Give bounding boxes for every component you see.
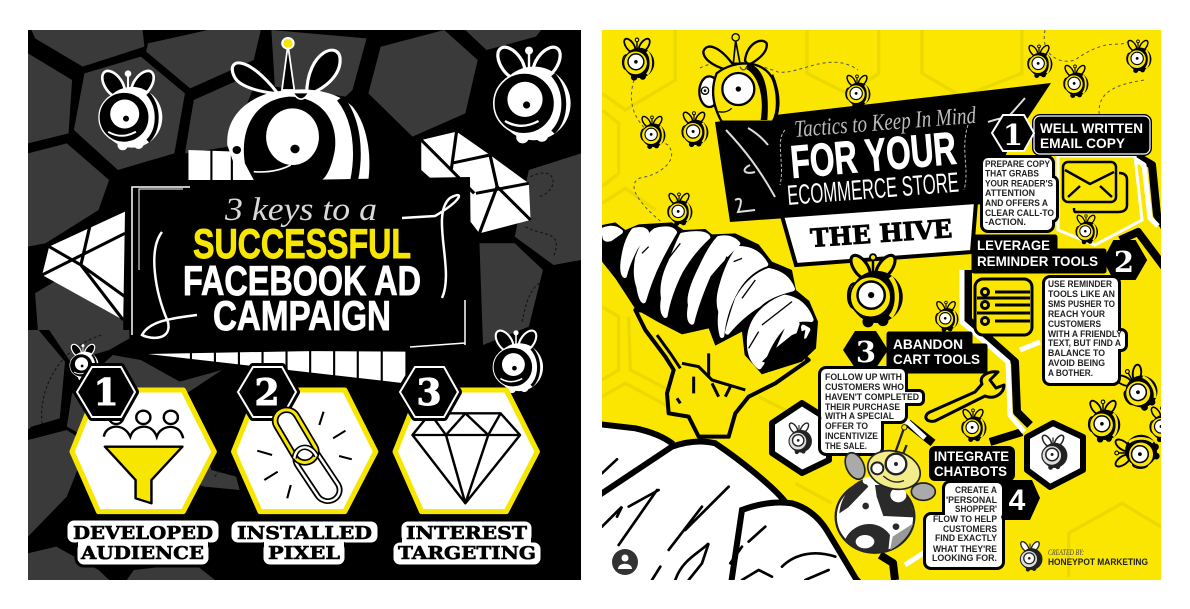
credit text: CREATED BY: — [1048, 548, 1084, 557]
credit text: HONEYPOT MARKETING — [1048, 557, 1148, 567]
script heading: Tactics to Keep In Mind — [793, 103, 978, 143]
text block 3: FOLLOW UP WITH — [825, 372, 902, 383]
item 3 abandon cart tools — [821, 331, 1004, 453]
title facebook ad: FACEBOOK AD — [183, 257, 421, 304]
text block 3: THE SALE. — [825, 441, 867, 452]
text block 2: BALANCE TO — [1048, 348, 1105, 359]
bee lower left — [69, 343, 99, 380]
wrench icon — [926, 372, 1004, 421]
text block 1: PREPARE COPY — [985, 159, 1051, 170]
heading ecommerce store: ECOMMERCE STORE — [786, 167, 960, 211]
text block 2: USE REMINDER — [1048, 279, 1112, 290]
text block 3: HAVEN'T COMPLETED — [825, 392, 919, 403]
flourish left — [142, 232, 197, 338]
number badge 3: 3 — [856, 335, 876, 369]
flight paths — [631, 30, 1145, 225]
hive path network — [880, 155, 1165, 580]
honey drip and stem — [635, 310, 809, 437]
text block 3: OFFER TO — [825, 421, 868, 432]
diamond left — [42, 212, 125, 320]
label interest targeting: TARGETING — [398, 544, 536, 564]
label developed audience: DEVELOPED — [73, 524, 213, 544]
spotted robot bee — [836, 425, 935, 553]
the hive plate — [782, 202, 976, 265]
hexagon background — [234, 390, 376, 512]
email icon — [1063, 162, 1127, 212]
checklist icon — [975, 279, 1032, 335]
number 1 — [77, 367, 135, 417]
label abandon — [889, 334, 985, 371]
hexagon with diamond icon — [395, 390, 537, 512]
label well written: EMAIL COPY — [1040, 135, 1126, 151]
text block 2 — [1045, 278, 1125, 383]
label leverage — [974, 237, 1104, 271]
panel: 3 keys to a successful Facebook ad campaign — [28, 30, 581, 580]
text block 4: CUSTOMERS — [943, 524, 997, 535]
text block 2: SMS PUSHER TO — [1048, 299, 1115, 310]
label developed audience — [66, 519, 220, 566]
text block 4: SHOPPER' — [955, 504, 997, 515]
text block 2: TEXT, BUT FIND A — [1048, 338, 1121, 349]
label developed audience: AUDIENCE — [80, 544, 204, 564]
number badge 3 — [843, 331, 888, 369]
title successful: SUCCESSFUL — [193, 220, 411, 267]
text block 2: CUSTOMERS — [1048, 319, 1101, 330]
title script: 3 keys to a — [224, 192, 377, 228]
text block 4: 'PERSONAL — [946, 495, 997, 506]
bee mid — [847, 252, 903, 327]
text block 4: WHAT THEY'RE — [933, 544, 997, 555]
bee — [1126, 39, 1151, 73]
label well written — [1034, 116, 1150, 154]
bee on email hex — [1076, 214, 1098, 244]
ribbon strip below banner — [148, 349, 405, 383]
chain link icon — [257, 412, 352, 498]
text block 3: WITH A SPECIAL — [825, 411, 894, 422]
bee lower right — [492, 327, 543, 393]
label integrate: CHATBOTS — [934, 463, 1007, 479]
big yellow bee — [699, 34, 778, 122]
main title banner — [715, 83, 1051, 222]
bottom honey mound — [602, 422, 861, 580]
number badge 4: 4 — [1009, 484, 1026, 517]
bee clipped edge — [1150, 406, 1176, 442]
avatar icon — [612, 549, 638, 575]
bee — [667, 192, 692, 226]
text block 1: ATTENTION — [985, 188, 1035, 199]
bee — [640, 115, 665, 149]
text block 3 — [821, 369, 922, 453]
text block 3: CUSTOMERS WHO — [825, 382, 904, 393]
label interest targeting — [392, 520, 542, 566]
bee — [1112, 360, 1165, 417]
honey dipper head — [602, 222, 818, 374]
key 1 developed audience — [66, 367, 220, 566]
text block 2: TOOLS LIKE AN — [1048, 289, 1115, 300]
label leverage: REMINDER TOOLS — [977, 253, 1098, 269]
hexagon with funnel icon — [72, 390, 214, 512]
number badge 2 — [1104, 241, 1146, 279]
bee — [1114, 435, 1160, 469]
bee — [935, 300, 958, 332]
text block 4: FIND EXACTLY — [935, 533, 998, 544]
label abandon: ABANDON — [893, 336, 963, 352]
label abandon: CART TOOLS — [893, 351, 980, 367]
label integrate — [931, 448, 1013, 479]
title banner — [124, 177, 472, 352]
key 2 installed pixel — [230, 367, 379, 566]
text block 1: YOUR READER'S — [985, 178, 1053, 190]
label installed pixel — [230, 520, 379, 566]
bee — [1027, 44, 1052, 78]
text block 3: THEIR PURCHASE — [825, 402, 900, 413]
text block 1: AND OFFERS A — [985, 198, 1048, 209]
text block 4 — [926, 483, 1002, 567]
flourish right — [402, 195, 459, 298]
text block 3: INCENTIVIZE — [825, 431, 878, 442]
text block 4: CREATE A — [955, 485, 997, 496]
text block 2: A BOTHER. — [1048, 368, 1093, 379]
text block 4: FLOW TO HELP — [933, 514, 998, 525]
number badge 2: 2 — [1114, 245, 1134, 279]
label interest targeting: INTEREST — [406, 524, 527, 544]
diamond right — [421, 132, 531, 233]
text block 2: REACH YOUR — [1048, 309, 1105, 320]
title campaign: CAMPAIGN — [213, 292, 391, 339]
big bee — [227, 37, 369, 180]
panel: tactics for your ecommerce store — [592, 30, 1185, 600]
email hexagon outline — [1058, 156, 1142, 245]
number 3 — [400, 367, 458, 417]
label installed pixel: PIXEL — [268, 544, 340, 564]
bee — [845, 74, 870, 108]
number badge 1: 1 — [1003, 118, 1023, 152]
empty hex with bee right — [1027, 423, 1083, 487]
label leverage: LEVERAGE — [977, 237, 1050, 253]
number badge 1 — [992, 115, 1034, 152]
text block 2: AVOID BEING — [1048, 358, 1105, 369]
number 2: 2 — [254, 372, 280, 414]
key 3 interest targeting — [392, 367, 542, 566]
the hive plate: THE HIVE — [809, 214, 953, 253]
empty hex with bee left — [772, 403, 829, 473]
text block 4: LOOKING FOR. — [932, 553, 997, 564]
label well written: WELL WRITTEN — [1040, 120, 1143, 136]
credit logo bee — [1019, 540, 1042, 572]
ribbon strip behind bee — [188, 150, 240, 180]
text block 1 — [983, 158, 1056, 230]
number 2 — [238, 367, 296, 417]
text block 1: CLEAR CALL-TO — [985, 208, 1054, 219]
item 4 integrate chatbots — [926, 448, 1040, 567]
bee — [622, 37, 654, 81]
bee small left — [98, 67, 162, 150]
heading for your: FOR YOUR — [788, 122, 958, 188]
label installed pixel: INSTALLED — [237, 524, 372, 544]
label integrate: INTEGRATE — [934, 448, 1009, 464]
bee top right — [492, 42, 571, 143]
number 1: 1 — [93, 372, 119, 414]
bee — [1063, 64, 1088, 98]
bee — [682, 111, 708, 147]
text block 1: -ACTION. — [985, 217, 1026, 228]
bee — [1088, 399, 1120, 443]
text block 2: WITH A FRIENDLY — [1048, 329, 1123, 340]
item 2 leverage reminder tools — [974, 237, 1146, 383]
flourish — [726, 98, 1025, 212]
credit text — [1048, 548, 1148, 567]
bee — [961, 408, 986, 442]
text block 1: THAT GRABS — [985, 168, 1039, 180]
item 1 well written email copy — [983, 115, 1150, 244]
number 3: 3 — [416, 372, 442, 414]
